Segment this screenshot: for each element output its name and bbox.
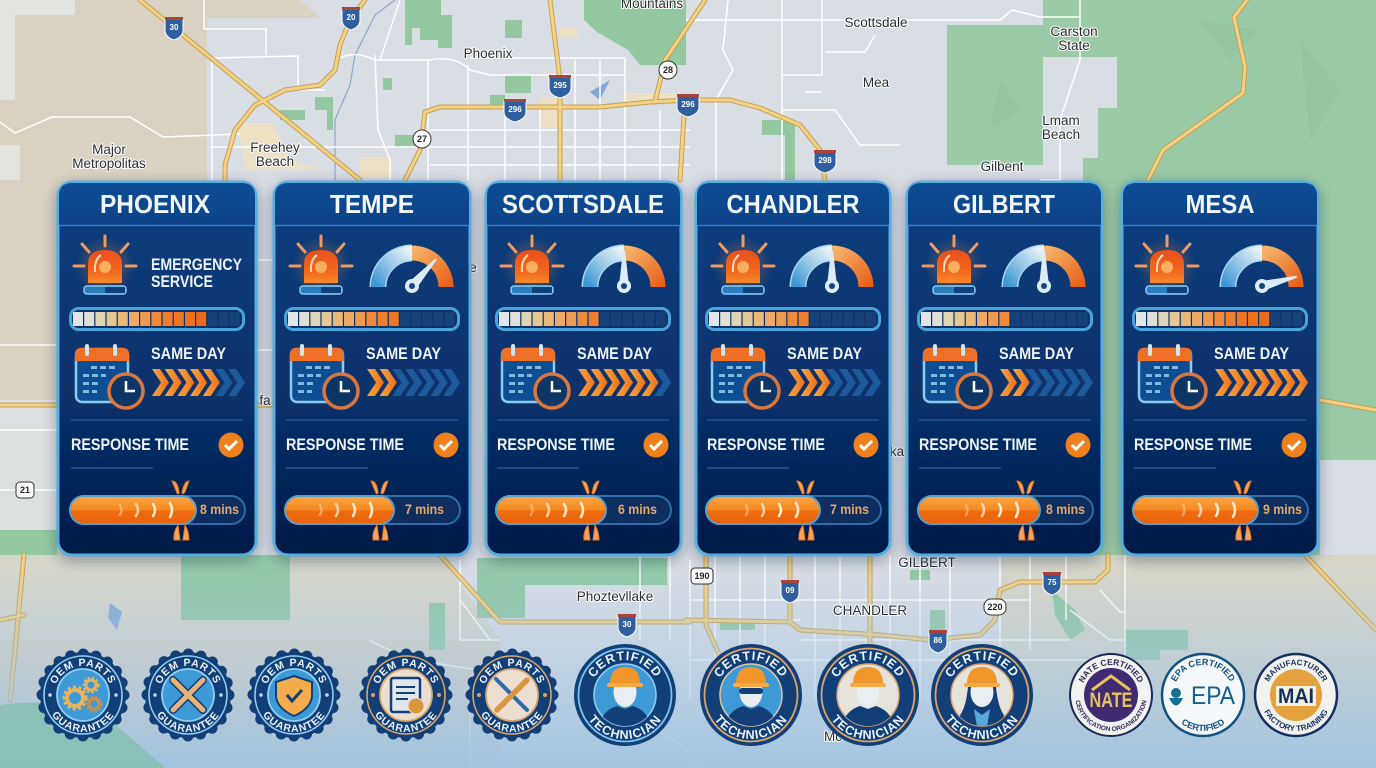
icon: calendar and clock xyxy=(75,344,143,408)
progress bar: 12 of 15 xyxy=(1134,308,1306,330)
same day label: SAME DAY xyxy=(151,344,227,363)
response time label: RESPONSE TIME xyxy=(919,435,1037,454)
same day label: SAME DAY xyxy=(1214,344,1290,363)
map place labels: State xyxy=(1058,38,1090,53)
progress bar: 12 of 15 xyxy=(70,308,244,330)
badge: OEM parts guarantee, clipboard: GUARANTEE xyxy=(376,712,437,732)
map place labels: Beach xyxy=(1042,127,1080,142)
header: Scottsdale xyxy=(487,183,680,226)
map place labels: Mea xyxy=(863,75,890,90)
header: Chandler xyxy=(697,183,889,226)
icon: calendar and clock xyxy=(923,344,991,408)
same day label: SAME DAY xyxy=(577,344,653,363)
response time bar: 7 mins xyxy=(285,481,460,540)
emergency service label: SERVICE xyxy=(151,272,213,291)
badge: certified technician, glasses: TECHNICIAN xyxy=(716,714,787,739)
icon: emergency siren xyxy=(923,236,985,296)
icon: calendar and clock xyxy=(711,344,779,408)
gauge xyxy=(1228,253,1299,295)
map place labels: Metropolitas xyxy=(72,156,146,171)
badge: certified technician, blue: CERTIFIED xyxy=(588,651,660,676)
badge: OEM parts guarantee, shield: OEM PARTS xyxy=(262,658,326,683)
badge: OEM parts guarantee, clipboard: OEM PARTS xyxy=(374,658,438,683)
response time bar: 8 mins xyxy=(918,481,1093,540)
map place labels: Phoztevllake xyxy=(577,589,653,604)
response time bar: 8 mins: 8 mins xyxy=(200,501,239,517)
badge: NATE certified: NATE xyxy=(1090,689,1132,712)
highway shields and route markers: 190 xyxy=(694,571,710,581)
highway shields and route markers: 220 xyxy=(987,602,1003,612)
panel: Tempe xyxy=(274,182,470,555)
badge: OEM parts guarantee, wrench and screwdriver: OEM PARTS xyxy=(480,658,544,683)
map place labels: CHANDLER xyxy=(833,603,907,618)
badge: manufacturer factory training: MAI xyxy=(1278,685,1314,708)
emergency service label xyxy=(151,255,243,291)
map place labels: Scottsdale xyxy=(844,15,908,30)
response time bar: 6 mins: 6 mins xyxy=(618,501,657,517)
badge: certified technician, cream xyxy=(817,644,919,746)
badge: EPA certified: CERTIFIED xyxy=(1182,720,1224,731)
badge: OEM parts guarantee, wrench and screwdriver: GUARANTEE xyxy=(482,712,543,732)
map place labels: fa xyxy=(259,393,271,408)
badge: OEM parts guarantee, gears xyxy=(36,648,130,742)
response time bar: 8 mins: 8 mins xyxy=(1046,501,1085,517)
header: Phoenix xyxy=(59,183,255,226)
icon: emergency siren xyxy=(74,236,136,296)
highway shields and route markers: 09 xyxy=(786,586,795,595)
highway shields and route markers: 296 xyxy=(508,105,522,114)
badge: certified technician, blue xyxy=(574,644,676,746)
badge: EPA certified: EPA CERTIFIED xyxy=(1170,658,1234,682)
icon: check mark xyxy=(1066,432,1090,458)
highway shields and route markers: 30 xyxy=(623,620,632,629)
same day label: SAME DAY xyxy=(366,344,442,363)
highway shields and route markers: 27 xyxy=(417,134,427,144)
icon: emergency siren xyxy=(712,236,774,296)
badge: NATE certified: CERTIFICATION ORGANIZATION xyxy=(1076,700,1146,731)
response time label: RESPONSE TIME xyxy=(1134,435,1252,454)
badge: OEM parts guarantee, shield: GUARANTEE xyxy=(264,712,325,732)
header: Tempe: TEMPE xyxy=(330,189,414,219)
badge: certified technician, woman: TECHNICIAN xyxy=(946,714,1018,739)
badge: certified technician, woman xyxy=(931,644,1033,746)
badge: OEM parts guarantee, gears: GUARANTEE xyxy=(53,712,114,732)
badge: certified technician, glasses: CERTIFIED xyxy=(714,651,786,676)
panel: Scottsdale xyxy=(486,182,681,555)
bottom haze gradient xyxy=(0,560,1376,768)
icon: emergency siren xyxy=(290,236,352,296)
map place labels: Freehey xyxy=(250,140,300,155)
chevrons: 6 of 7 xyxy=(578,369,671,396)
emergency service label: EMERGENCY xyxy=(151,255,243,274)
teal water area bottom left xyxy=(0,702,165,768)
response time label: RESPONSE TIME xyxy=(286,435,404,454)
map place labels: e xyxy=(469,260,477,275)
gauge xyxy=(798,250,866,293)
response time bar: 7 mins xyxy=(706,481,881,540)
badge: OEM parts guarantee, wrenches: GUARANTEE xyxy=(158,712,219,732)
icon: check mark xyxy=(434,432,458,458)
response time bar: 7 mins: 7 mins xyxy=(405,501,444,517)
panel: Chandler xyxy=(696,182,890,555)
badge: certified technician, cream: TECHNICIAN xyxy=(832,714,904,739)
same day label: SAME DAY xyxy=(787,344,863,363)
icon: emergency siren xyxy=(501,236,563,296)
map place labels: Major xyxy=(92,142,126,157)
header: Chandler: CHANDLER xyxy=(726,189,860,219)
progress bar: 9 of 15 xyxy=(496,308,670,330)
header: Gilbert: GILBERT xyxy=(953,189,1055,219)
icon: emergency siren xyxy=(1136,236,1198,296)
badge: OEM parts guarantee, wrench and screwdriver xyxy=(466,648,558,742)
progress bar: 8 of 15 xyxy=(918,308,1092,330)
response time bar: 9 mins xyxy=(1133,481,1308,540)
header: Phoenix: PHOENIX xyxy=(100,189,211,219)
badge: EPA certified xyxy=(1160,652,1246,738)
response time bar: 7 mins: 7 mins xyxy=(830,501,869,517)
highway shields and route markers: 298 xyxy=(818,156,832,165)
response time label: RESPONSE TIME xyxy=(707,435,825,454)
badge: certified technician, woman: CERTIFIED xyxy=(946,651,1018,676)
icon: check mark xyxy=(218,432,244,458)
badge: manufacturer factory training: MANUFACTURER xyxy=(1264,660,1328,682)
map place labels xyxy=(72,0,1098,744)
map place labels: Lmam xyxy=(1042,113,1080,128)
icon: check mark xyxy=(644,432,668,458)
badge: manufacturer factory training: FACTORY TRAINING xyxy=(1264,709,1328,731)
badge: manufacturer factory training xyxy=(1254,652,1338,738)
badge: certified technician, glasses xyxy=(700,644,802,746)
header: Mesa: MESA xyxy=(1186,189,1255,219)
badge: EPA certified: EPA xyxy=(1191,682,1235,710)
gauge xyxy=(590,250,658,293)
panel: Mesa xyxy=(1122,182,1318,555)
badge: OEM parts guarantee, clipboard xyxy=(360,648,452,742)
map place labels: Carston xyxy=(1050,24,1098,39)
highway shields and route markers: 75 xyxy=(1048,578,1057,587)
header: Mesa xyxy=(1123,183,1317,226)
chevrons: 2 of 7 xyxy=(367,369,460,396)
chevrons: 7 of 7 xyxy=(1215,369,1308,396)
badge: OEM parts guarantee, wrenches xyxy=(142,648,234,742)
progress bar: 10 of 15 xyxy=(286,308,458,330)
panel: Gilbert xyxy=(907,182,1102,555)
header: Scottsdale: SCOTTSDALE xyxy=(502,189,664,219)
highway shields and route markers xyxy=(16,7,1061,653)
badge: OEM parts guarantee, wrenches: OEM PARTS xyxy=(156,658,220,683)
icon: check mark xyxy=(854,432,878,458)
gauge xyxy=(378,253,446,296)
same day label: SAME DAY xyxy=(999,344,1075,363)
map place labels: Phoenix xyxy=(464,46,513,61)
response time label: RESPONSE TIME xyxy=(497,435,615,454)
response time bar: 8 mins xyxy=(70,481,245,540)
highway shields and route markers: 86 xyxy=(934,636,943,645)
icon: calendar and clock xyxy=(1138,344,1206,408)
header: Tempe xyxy=(275,183,469,226)
icon: calendar and clock xyxy=(501,344,569,408)
response time bar: 9 mins: 9 mins xyxy=(1263,501,1302,517)
chevrons: 3 of 7 xyxy=(788,369,881,396)
response time label: RESPONSE TIME xyxy=(71,435,189,454)
gauge xyxy=(1010,250,1078,293)
map place labels: GILBERT xyxy=(898,555,956,570)
highway shields and route markers: 295 xyxy=(553,81,567,90)
panel: Phoenix xyxy=(58,182,256,555)
highway shields and route markers: 296 xyxy=(681,100,695,109)
chevrons: 2 of 7 xyxy=(1000,369,1093,396)
header: Gilbert xyxy=(908,183,1101,226)
map place labels: Mc xyxy=(824,729,842,744)
highway shields and route markers: 30 xyxy=(170,23,179,32)
highway shields and route markers: 21 xyxy=(20,485,30,495)
badge: certified technician, cream: CERTIFIED xyxy=(832,651,904,676)
progress bar: 9 of 15 xyxy=(706,308,880,330)
badge: NATE certified xyxy=(1069,653,1153,737)
map place labels: Beach xyxy=(256,154,294,169)
chevrons: 5 of 7 xyxy=(152,369,245,396)
icon: calendar and clock xyxy=(290,344,358,408)
map place labels: Gilbent xyxy=(981,159,1024,174)
badge: certified technician, blue: TECHNICIAN xyxy=(590,714,661,739)
badge: OEM parts guarantee, shield xyxy=(248,648,340,742)
badge: OEM parts guarantee, gears: OEM PARTS xyxy=(50,658,116,683)
highway shields and route markers: 28 xyxy=(663,65,673,75)
response time bar: 6 mins xyxy=(496,481,671,540)
highway shields and route markers: 20 xyxy=(347,13,356,22)
map place labels: ka xyxy=(890,444,905,459)
badge: NATE certified: NATE CERTIFIED xyxy=(1078,659,1143,683)
icon: check mark xyxy=(1282,432,1306,458)
